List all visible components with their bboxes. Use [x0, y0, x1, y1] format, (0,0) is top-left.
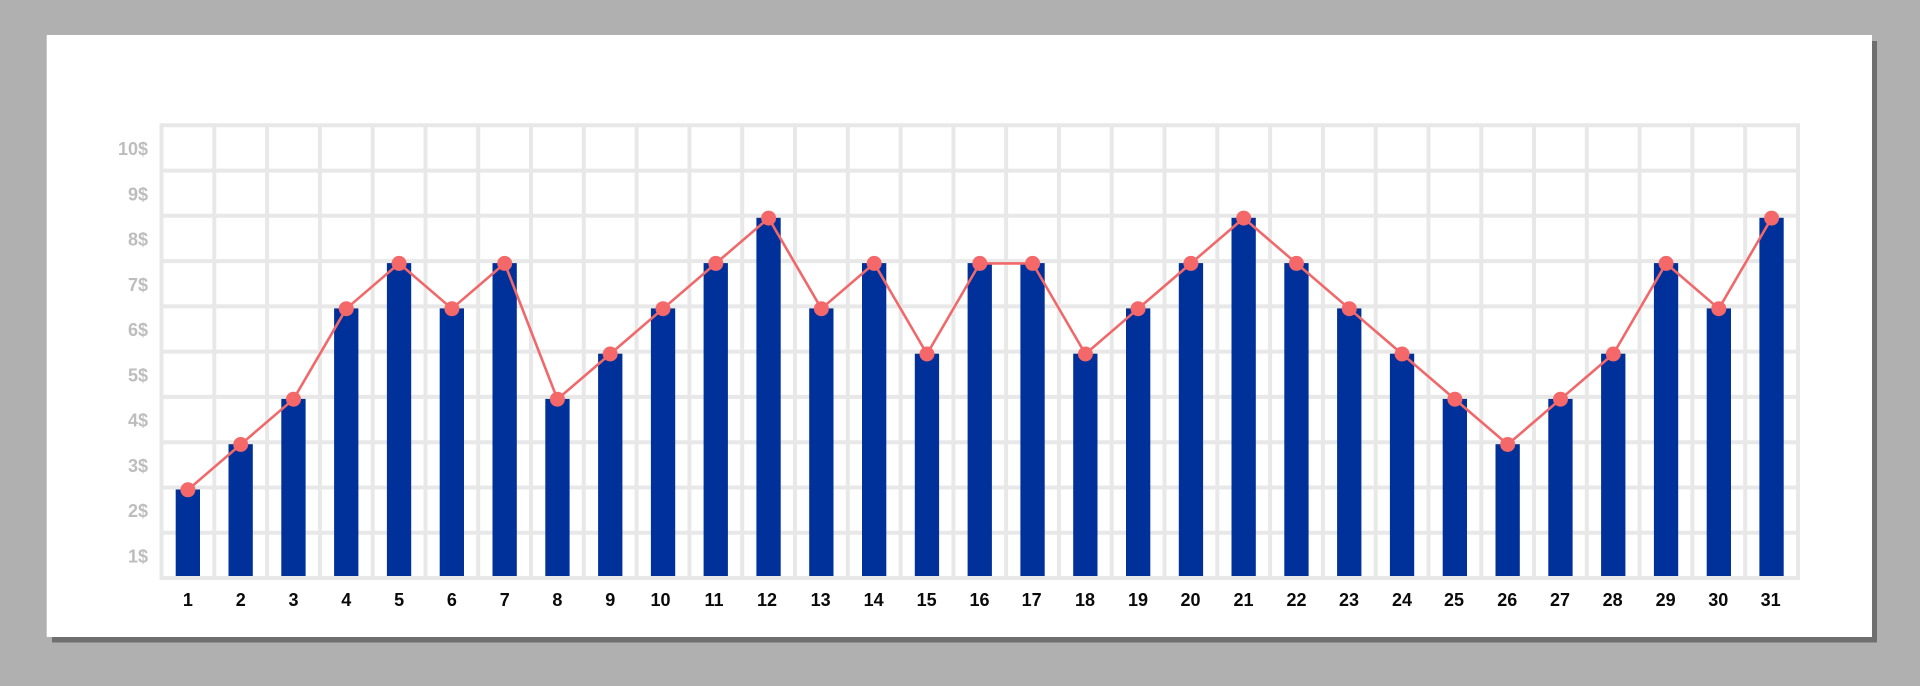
x-axis labels: 2 [236, 590, 246, 610]
x-axis labels: 3 [288, 590, 299, 610]
x-axis labels: 7 [500, 590, 510, 610]
x-axis labels: 6 [447, 590, 457, 610]
x-axis labels: 4 [341, 590, 351, 610]
y-axis labels: 2$ [128, 501, 148, 521]
y-axis labels: 6$ [128, 320, 148, 340]
x-axis labels: 14 [864, 590, 884, 610]
x-axis labels: 12 [757, 590, 777, 610]
x-axis labels: 21 [1233, 590, 1254, 610]
y-axis labels [118, 139, 148, 566]
y-axis labels: 1$ [128, 546, 148, 566]
y-axis labels: 7$ [128, 275, 148, 295]
x-axis labels [183, 590, 1781, 610]
x-axis labels: 25 [1444, 590, 1464, 610]
bar chart: daily bars [176, 218, 1784, 576]
x-axis labels: 15 [917, 590, 937, 610]
line chart: data points [180, 211, 1779, 497]
x-axis labels: 9 [605, 590, 615, 610]
y-axis labels: 9$ [128, 184, 148, 204]
x-axis labels: 28 [1603, 590, 1623, 610]
x-axis labels: 8 [552, 590, 562, 610]
x-axis labels: 23 [1339, 590, 1359, 610]
x-axis labels: 26 [1497, 590, 1517, 610]
x-axis labels: 16 [969, 590, 990, 610]
y-axis labels: 4$ [128, 411, 148, 431]
x-axis labels: 5 [394, 590, 404, 610]
x-axis labels: 22 [1286, 590, 1307, 610]
x-axis labels: 18 [1075, 590, 1095, 610]
x-axis labels: 19 [1128, 590, 1148, 610]
y-axis labels: 3$ [128, 456, 148, 476]
x-axis labels: 11 [704, 590, 724, 610]
x-axis labels: 1 [183, 590, 193, 610]
x-axis labels: 13 [811, 590, 831, 610]
x-axis labels: 24 [1392, 590, 1412, 610]
x-axis labels: 31 [1761, 590, 1781, 610]
x-axis labels: 17 [1022, 590, 1042, 610]
x-axis labels: 29 [1656, 590, 1676, 610]
y-axis labels: 10$ [118, 139, 148, 159]
x-axis labels: 10 [650, 590, 671, 610]
line chart: trend line [188, 218, 1772, 490]
x-axis labels: 30 [1708, 590, 1728, 610]
x-axis labels: 20 [1180, 590, 1201, 610]
x-axis labels: 27 [1550, 590, 1570, 610]
y-axis labels: 5$ [128, 365, 148, 385]
y-axis labels: 8$ [128, 230, 148, 250]
